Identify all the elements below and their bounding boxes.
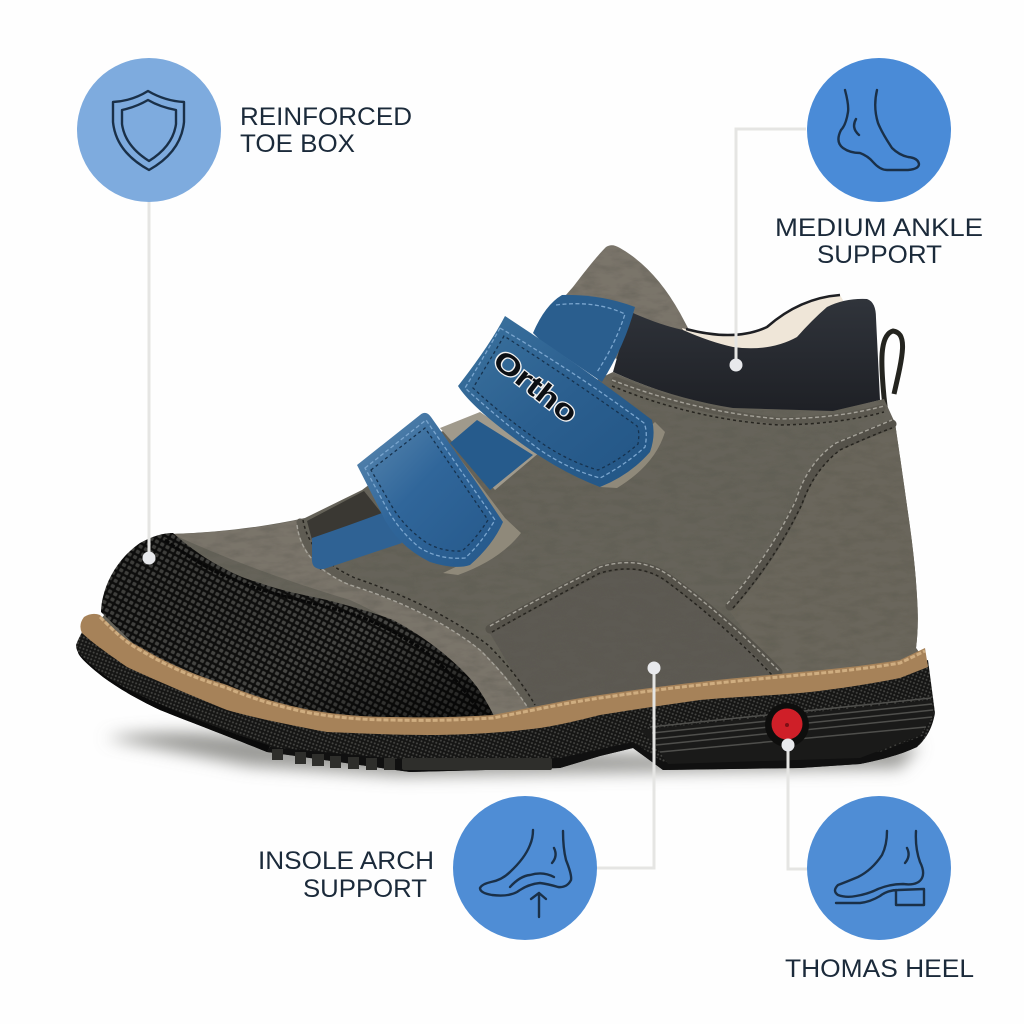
heel counter panel	[727, 423, 926, 680]
panel stitching	[297, 380, 892, 708]
lining	[682, 295, 860, 380]
ground shadow	[105, 732, 920, 776]
icon: ankle foot	[838, 90, 919, 170]
toe strip	[172, 520, 532, 718]
callout: insole arch support: SUPPORT	[303, 875, 427, 903]
sole	[76, 628, 935, 772]
callout: reinforced toe box	[77, 58, 412, 202]
upper strap back	[533, 295, 635, 382]
leader: medium ankle support	[730, 129, 806, 372]
lower blue band	[312, 513, 402, 569]
callout: reinforced toe box: REINFORCED	[240, 103, 412, 131]
icon: shield	[113, 91, 184, 170]
lower slot	[307, 491, 395, 570]
callout: reinforced toe box: TOE BOX	[240, 130, 355, 158]
reinforced toe cap	[101, 533, 495, 720]
collar rim	[686, 295, 840, 335]
upper leather	[100, 372, 926, 722]
dark collar	[613, 299, 880, 412]
lower strap	[357, 413, 521, 575]
callout: insole arch support: INSOLE ARCH	[258, 847, 434, 875]
brand logo: Ortho	[487, 344, 584, 430]
callout: thomas heel: THOMAS HEEL	[785, 955, 974, 983]
tan welt	[80, 614, 928, 735]
saddle panel	[488, 566, 782, 714]
callout: medium ankle support	[775, 58, 983, 269]
upper strap	[458, 316, 665, 488]
leader: insole arch support	[597, 662, 660, 868]
tongue	[535, 245, 688, 360]
pull tab	[882, 331, 903, 423]
heel button	[765, 703, 809, 747]
icon: foot with arch arrow	[480, 830, 571, 917]
shoe illustration	[76, 245, 935, 772]
callout: insole arch support	[258, 796, 597, 940]
leader: reinforced toe box	[142, 202, 156, 564]
callout: thomas heel	[785, 796, 974, 983]
callout: medium ankle support: MEDIUM ANKLE	[775, 214, 983, 242]
middle slot edge	[440, 412, 540, 490]
leader: thomas heel	[782, 738, 808, 869]
callout: medium ankle support: SUPPORT	[817, 241, 942, 269]
icon: foot on heel	[835, 831, 924, 905]
middle blue band	[450, 420, 533, 490]
